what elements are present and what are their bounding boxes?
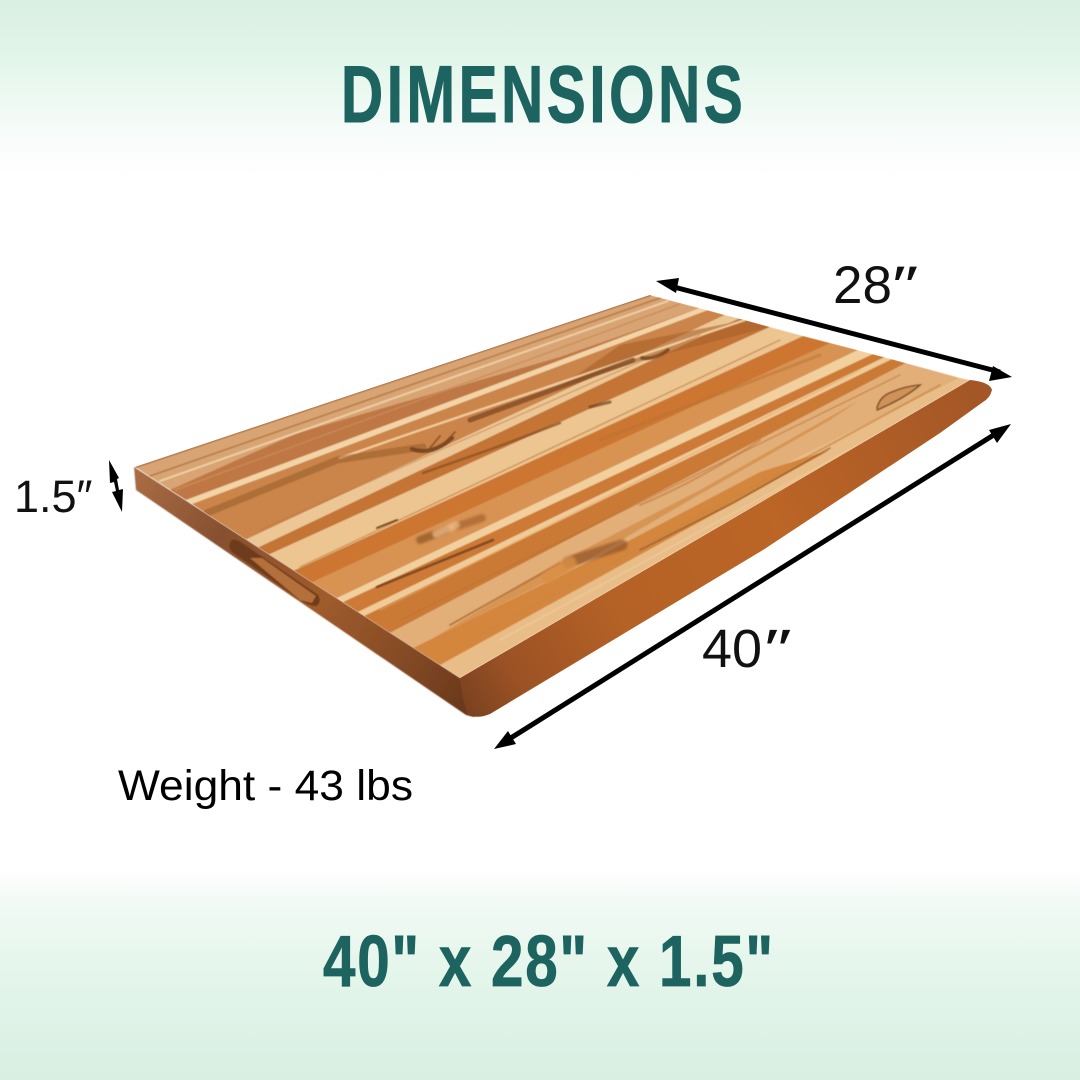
- arrow: 40 inch length: [494, 424, 1011, 749]
- handle slot: [230, 540, 320, 606]
- label: 28 inch: [833, 255, 918, 315]
- arrow: 28 inch width: [656, 278, 1012, 381]
- title: DIMENSIONS: [341, 49, 746, 139]
- label: 1.5 inch: 1.5″: [14, 471, 93, 522]
- label: 40 inch: ″: [764, 619, 792, 679]
- board side edge: [134, 467, 490, 717]
- cutting board: [134, 295, 992, 717]
- label: 40 inch: [702, 619, 792, 679]
- bottom dimensions heading: 40" x 28" x 1.5": [323, 921, 775, 1001]
- arrow: 1.5 inch thickness: [109, 460, 123, 512]
- label: 28 inch: ″: [892, 255, 918, 315]
- wood knots: [412, 350, 920, 577]
- weight label: Weight - 43 lbs: [118, 762, 413, 810]
- board top surface: [135, 295, 970, 678]
- label: 28 inch: 28: [833, 256, 892, 315]
- board long bevel: [460, 380, 992, 717]
- wood grain lines: [135, 295, 960, 640]
- label: 40 inch: 40: [702, 619, 762, 679]
